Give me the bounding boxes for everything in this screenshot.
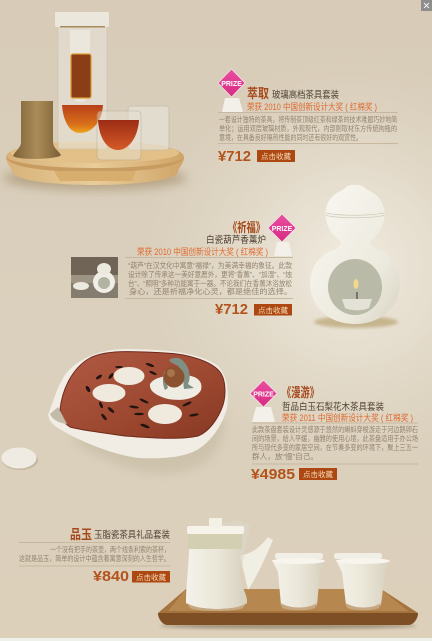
description: 设计除了传承这一美好意愿外，更将“香薰”、“加湿”、“烛 [128,269,292,279]
button: 点击收藏 [261,151,291,161]
panel: 祈福 product info [71,214,296,318]
description: 群人，放“慢”自己。 [252,451,318,461]
teapot [186,518,273,611]
product name [70,527,170,542]
product name: 《祈福》 [228,220,265,235]
button [299,468,337,480]
product image: glass tea set [3,12,187,190]
description [19,544,170,563]
product name: 玻璃高档茶具套装 [272,89,339,101]
panel: 品玉 product info [19,527,170,585]
description: “葫芦”在汉文化中寓意“福禄”，为美满幸福的象征。此款 [128,260,292,270]
price: ¥712 [218,148,251,165]
button: 点击收藏 [303,469,333,479]
button [257,150,295,162]
price: ¥4985 [251,466,295,483]
icon: award trophy [218,69,245,112]
description [219,114,397,142]
product name: 萃取 [247,86,269,101]
panel: 漫游 product info [250,380,418,483]
description [128,260,292,296]
button: 点击收藏 [258,305,288,315]
button: 点击收藏 [136,572,166,582]
loose pebble [2,448,38,470]
icon: award trophy: PRIZE [221,81,242,88]
description: 意境，在具备良好隔热性能的同时还有很好的观赏性。 [219,132,362,142]
award line: 荣获 2010 中国创新设计大奖 ( 红棉奖 ) [247,101,377,112]
description: 台”、“照明”多种功能寓于一器。不论我们在香薰沐浴放松 [128,278,292,288]
description: 一个没有把手的茶壶，两个线条利索的茶杯， [50,544,170,554]
button [254,304,292,316]
product name [247,86,339,101]
description: 这就是品玉，简单的设计中蕴含着寓意深刻的人生哲学。 [19,553,170,563]
product name: 《漫游》 [282,385,319,400]
front cups [272,558,390,610]
icon: award trophy [268,214,296,256]
product image: gourd incense burner [310,185,400,328]
price: ¥840 [93,568,129,585]
award line: 荣获 2010 中国创新设计大奖 ( 红棉奖 ) [137,246,268,257]
price: ¥712 [215,301,248,318]
icon: award trophy [250,380,277,422]
icon: award trophy: PRIZE [272,226,293,233]
description: 身心，还是祈福净化心灵，都是绝佳的选择。 [129,286,292,296]
button [132,571,170,582]
back cups [275,553,382,559]
thumbnail photo [71,257,118,298]
product name: 品玉 [70,527,92,542]
panel: 萃取 product info [218,69,398,165]
subtitle: 哲品白玉石梨花木茶具套装 [282,401,384,413]
icon: award trophy: PRIZE [253,392,274,398]
product name: 玉脂瓷茶具礼品套装 [94,529,170,541]
frog figurine [163,358,194,390]
subtitle: 白瓷葫芦香薰炉 [206,234,266,246]
product image: white porcelain tea set on bamboo tray [158,518,418,629]
close button [421,0,432,11]
product image: rosewood tea tray [2,349,228,474]
description [252,424,418,461]
tadpole slots [85,362,199,429]
